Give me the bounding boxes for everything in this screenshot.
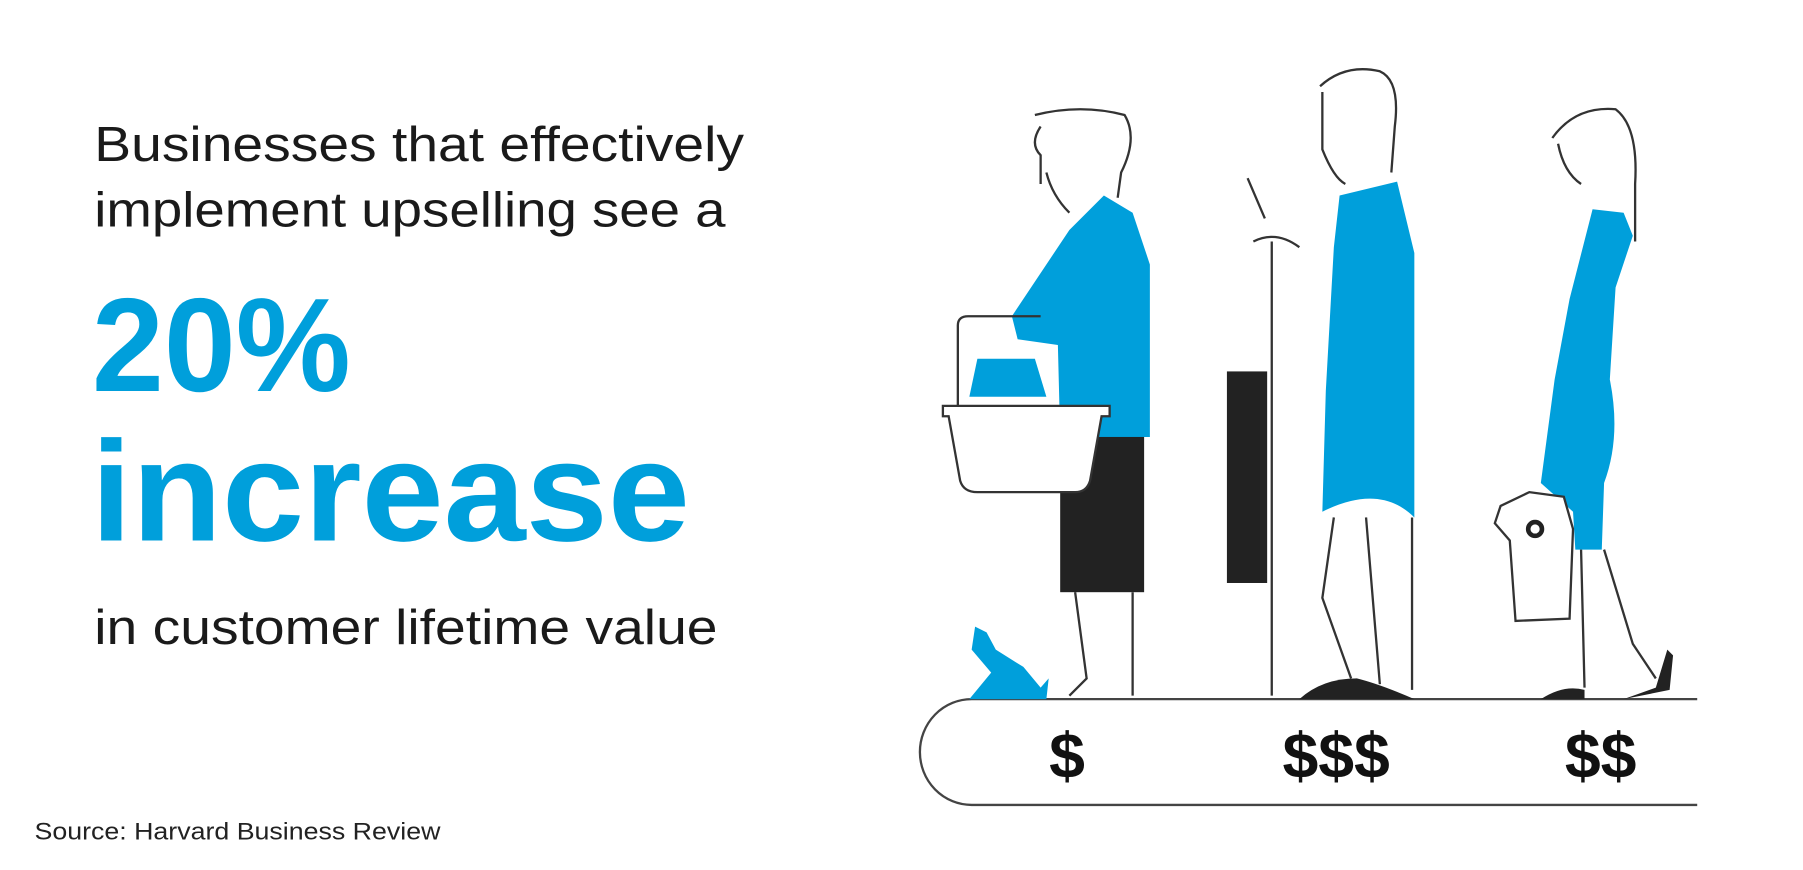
intro text: implement upselling see a <box>94 183 726 238</box>
dog <box>969 627 1049 699</box>
figure: man with pole <box>1227 69 1414 699</box>
figure: woman with bag <box>1495 109 1673 699</box>
big stat: increase: increase <box>91 412 690 571</box>
intro text <box>94 117 744 238</box>
price labels <box>1049 719 1636 791</box>
conveyor belt <box>920 699 1697 805</box>
big stat: 20%: 20% <box>92 271 351 420</box>
price labels: $ <box>1049 719 1085 791</box>
intro text: Businesses that effectively <box>94 117 744 172</box>
basket <box>958 316 1041 408</box>
subtext: in customer lifetime value <box>94 600 718 655</box>
figure: older woman with basket and dog <box>943 109 1150 699</box>
price labels: $$$ <box>1282 719 1390 791</box>
price labels: $$ <box>1565 719 1636 791</box>
source: Source: Harvard Business Review <box>34 818 441 845</box>
